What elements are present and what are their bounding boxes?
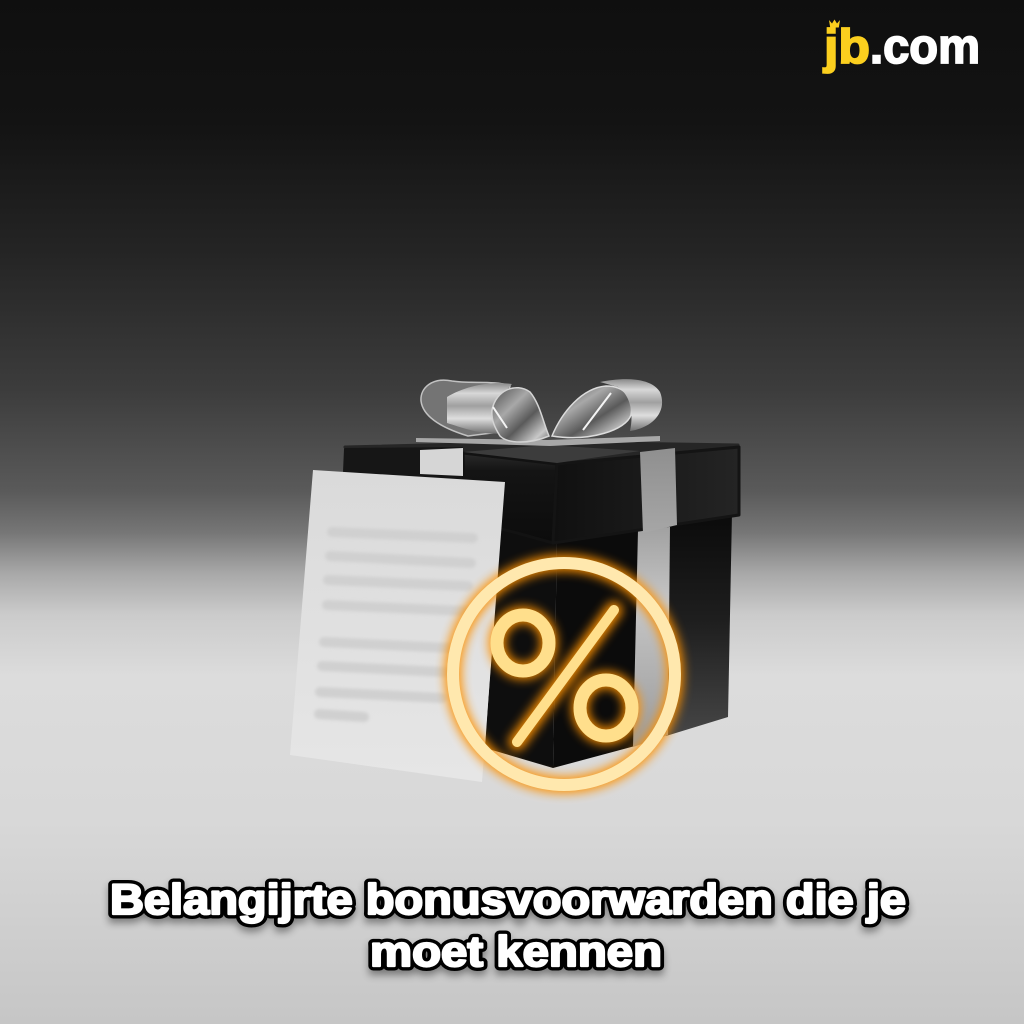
neon glow [453,563,675,785]
bow glint [493,393,611,430]
title shadow: moet kennen [370,933,662,981]
left bow band [447,383,512,434]
gift box [344,442,739,768]
illustration: gift box with document and percent sign [290,379,739,785]
sheet [290,470,505,782]
vertical ribbon on body [633,525,670,747]
neon percent symbol [453,563,675,785]
box body middle section [553,528,640,768]
percent slash [517,610,614,742]
title outline: Belangijrte bonusvoorwarden die je [110,876,906,924]
bow base strip [416,436,660,446]
ribbon on lid left [420,448,463,476]
left outer loop [421,380,510,436]
title shadow [110,881,906,981]
icon: crown [829,20,840,28]
embossed text lines [319,532,473,717]
lid front-left face [463,453,557,543]
box body left face [485,530,557,768]
title text: moet kennen [370,928,662,976]
title outline: moet kennen [370,928,662,976]
document sheet [290,470,505,782]
logo wordmark .com: .com [870,20,980,74]
title [110,876,906,981]
title outline [110,876,906,976]
lid front-right face [553,447,739,543]
title text [110,876,906,976]
lid top highlight [463,445,640,463]
title text: Belangijrte bonusvoorwarden die je [110,876,906,924]
title shadow: Belangijrte bonusvoorwarden die je [110,881,906,929]
ribbon on lid right [640,448,677,533]
percent upper circle [497,615,549,671]
logo: jb.com [823,20,980,74]
silver bow [416,379,662,446]
lid left back face [344,448,462,480]
left inner loop [492,388,549,442]
right inner loop [552,386,632,438]
right bow band [600,379,662,431]
lid top [345,442,738,463]
logo wordmark jb: jb [823,21,870,74]
box body right section [666,512,732,736]
percent lower circle [580,680,632,736]
percent ring [453,563,675,785]
